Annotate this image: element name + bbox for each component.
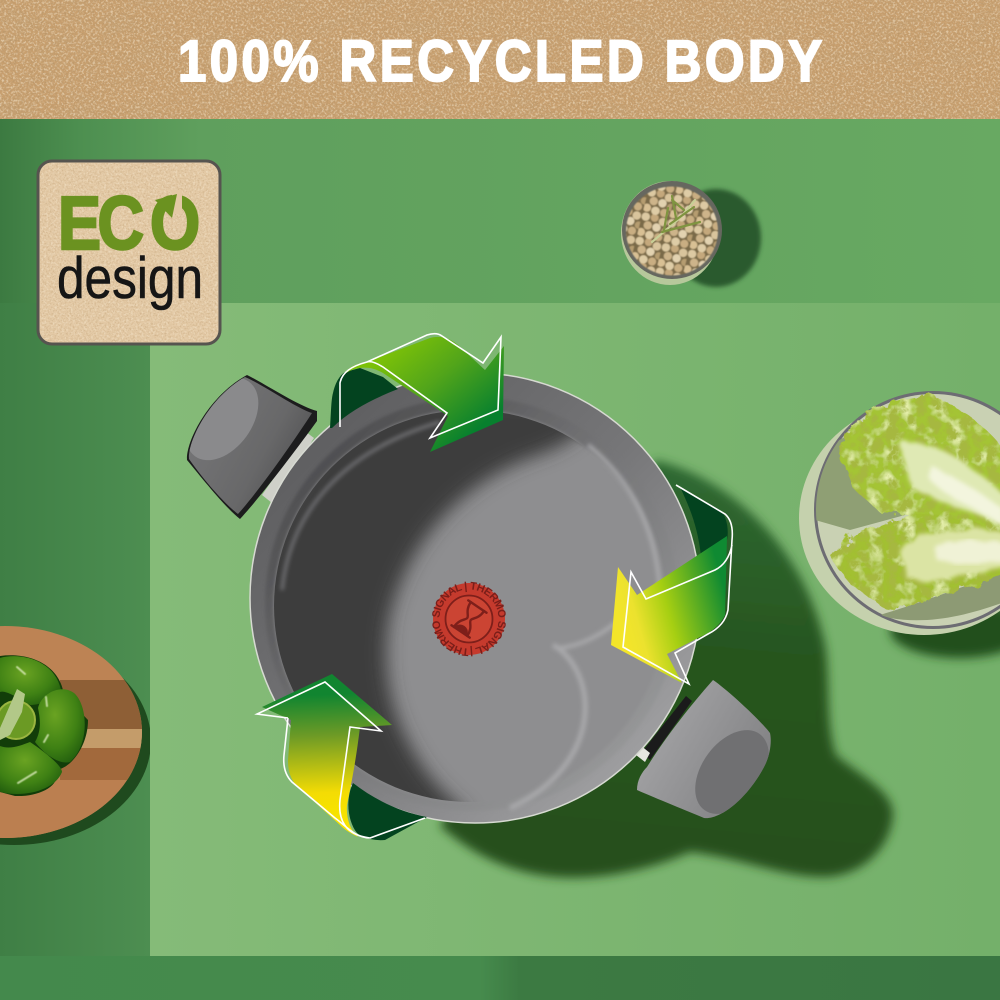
lettuce lower half [828,512,1000,610]
eco wordmark: C [98,181,144,265]
light green sheet [150,303,1000,956]
eco wordmark: O [150,181,200,265]
thermo signal badge: THERMO SIGNAL | THERMO SIGNAL | [432,582,506,656]
right handle [637,680,771,818]
board shadow on side panel [0,677,150,845]
left handle rivet [262,432,314,503]
eco wordmark [58,181,200,265]
lettuce bowl [799,391,1000,658]
title: 100% RECYCLED BODY [178,29,822,94]
lettuce upper half [838,395,1000,528]
recycling arrow: right [611,485,732,684]
pot cast shadow [440,460,893,878]
pot outer rim [250,373,700,823]
left handle [186,375,317,519]
eco wordmark: E [58,181,101,265]
inner wall highlights [282,422,660,808]
pot inner wall [265,397,679,811]
right handle bracket [636,696,692,762]
hourglass icon [451,600,487,638]
recycling arrow: bottom left [257,674,427,840]
design wordmark: design [57,246,203,311]
kraft header band [0,0,1000,119]
recycling arrow in the O [155,190,182,218]
cutting board with pepper [0,626,150,840]
recycling arrow: top [330,334,504,452]
wood grain and shadow [0,680,150,840]
pot floor [272,411,663,810]
spice bowl [621,181,761,287]
eco design badge [38,161,220,344]
rosemary sprig [652,196,700,242]
pepper calyx and stem [0,689,35,740]
green bell pepper [0,655,88,796]
pot [186,342,771,840]
